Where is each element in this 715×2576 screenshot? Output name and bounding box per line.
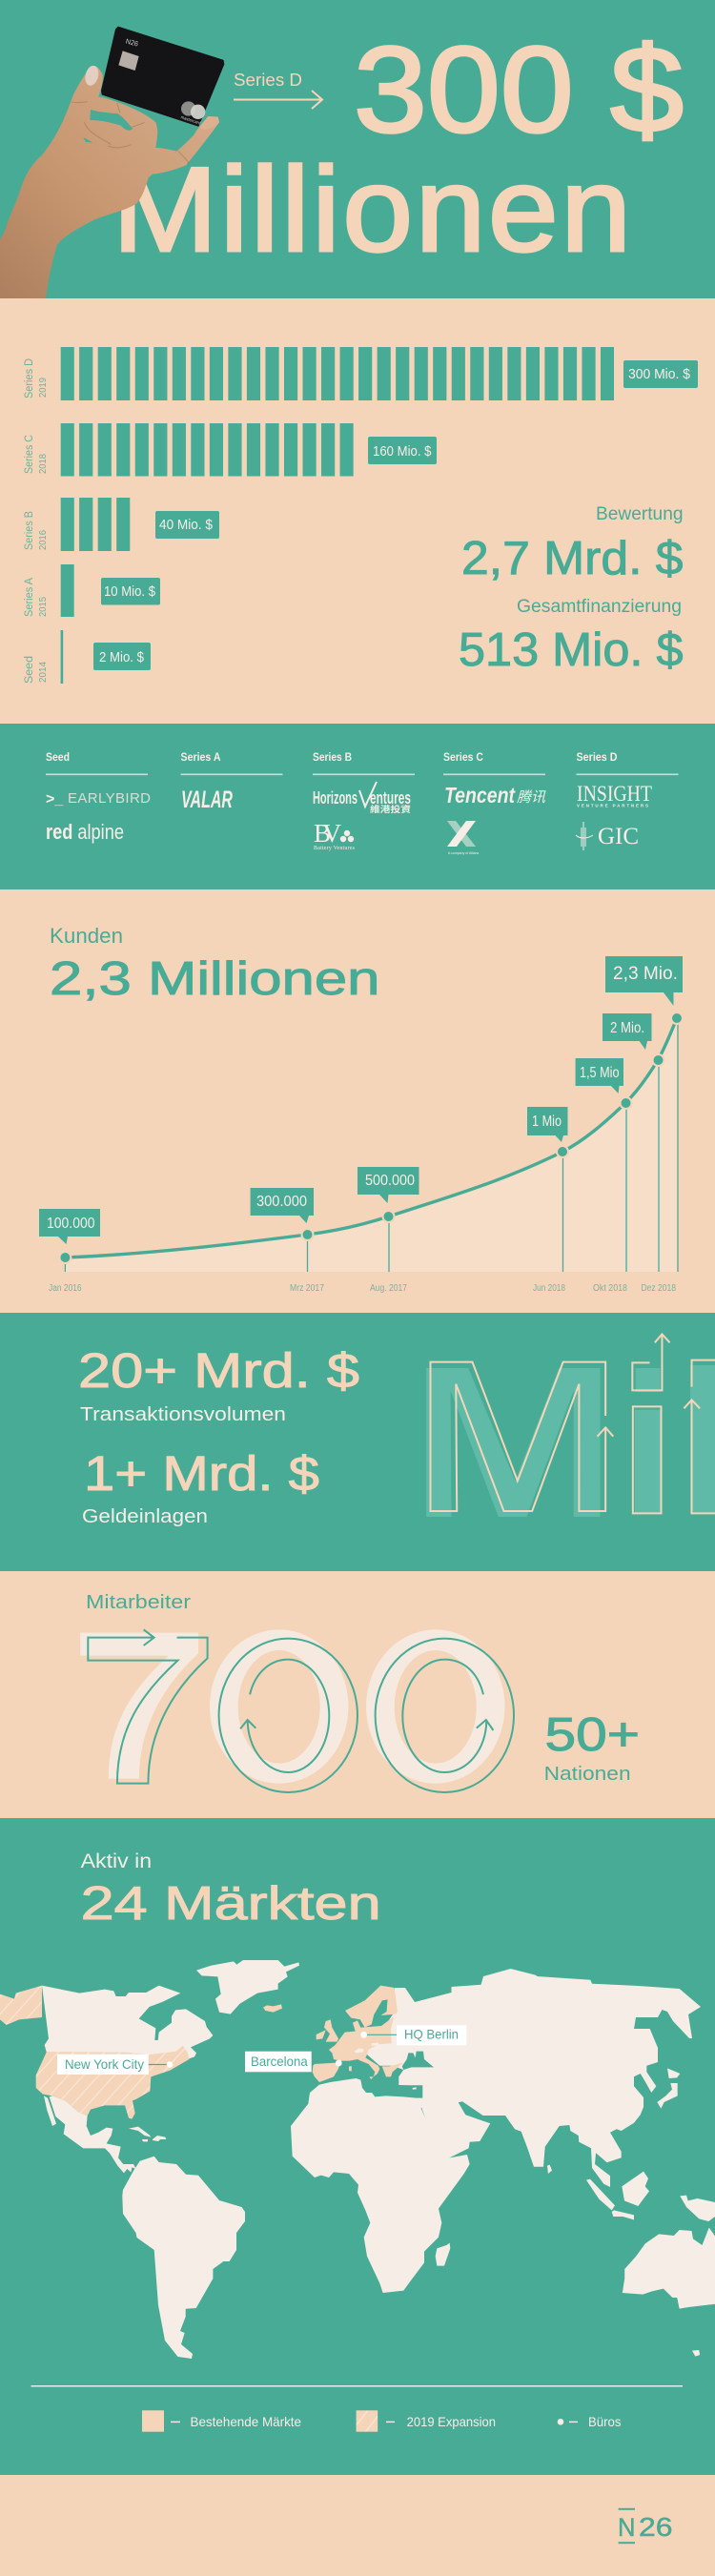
column: Seed investors [46,750,151,844]
logo: N26 [618,2508,673,2544]
column: Seed investors: EARLYBIRD [68,790,151,807]
axis labels: rounds and years: 2015 [37,597,49,617]
axis labels: dates: Aug. 2017 [370,1283,407,1294]
axis labels: dates: Jan 2016 [49,1283,82,1294]
legend: 2019 Expansion [407,2414,496,2429]
column: Series C investors [443,750,546,855]
chart: funding bars [61,347,614,684]
callouts: customer milestones: 100.000 [47,1216,95,1232]
axis labels: dates: Dez 2018 [641,1283,676,1294]
axis labels: rounds and years: Series B [24,511,35,550]
label: Barcelona office: Barcelona [251,2054,308,2069]
heading: 300 $: 300 $ [354,22,684,158]
column: Series D investors: GIC [598,824,639,849]
map: Africa, Europe and Mediterranean [291,2016,470,2293]
axis labels: rounds and years: 2019 [37,378,49,398]
icon: black card: mastercard [180,114,202,126]
panel: footer [0,2475,715,2576]
column: Series B investors: entures [370,788,411,808]
map: South America [122,2157,245,2359]
map: Asian islands [547,2068,715,2221]
column: Series D investors: Series D [576,750,618,764]
stat: Gesamtfinanzierung [459,597,683,676]
column: Series B investors: Horizons [313,788,358,808]
stat: deposits: Geldeinlagen [82,1506,208,1527]
stat: Bewertung: Bewertung [596,504,683,524]
stat: nations: Nationen [544,1764,631,1785]
column: Series C investors: 腾讯 [517,787,546,807]
axis labels: rounds and years: Series A [24,578,35,617]
panel: customers [0,889,715,1313]
logo: N26: 26 [639,2512,673,2542]
column: Series A investors: VALAR [181,787,233,813]
bar value labels: 10 Mio. $ [104,584,155,600]
axis labels: rounds and years: 2016 [37,530,49,550]
column: Series D investors [576,750,679,850]
label: Kunden: Kunden [50,924,123,948]
callouts: customer milestones: 2,3 Mio. [613,964,678,984]
legend: Bestehende Märkte [191,2414,301,2429]
stat: Gesamtfinanzierung: Gesamtfinanzierung [517,597,682,617]
panel: funding rounds [0,298,715,724]
illustration: outlined letters Mil [426,1334,715,1517]
panel: markets [0,1818,715,2475]
panel: investors [0,724,715,889]
stat: deposits [82,1446,319,1527]
column: Series B investors: Battery Ventures [314,846,356,851]
icon: black card [102,27,224,126]
axis labels: rounds and years: Series D [24,358,35,399]
map: Eurasia [367,1969,701,2187]
stat: Bewertung [461,504,683,584]
heading: Millionen: Millionen [112,143,631,276]
stat: Bewertung: 2,7 Mrd. $ [461,533,683,584]
column: Series B investors: BV [314,819,341,848]
illustration: outlined number 700 [80,1629,514,1792]
bar value labels: 160 Mio. $ [373,444,431,460]
column: Series C investors: Tencent [444,783,516,808]
column: Series B investors [313,750,415,851]
stat: nations: 50+ [545,1709,640,1761]
column: Series B investors: 維港投資 [370,803,411,815]
bar value labels [93,360,698,670]
axis labels: rounds and years: 2014 [37,662,49,683]
callouts: customer milestones [39,956,683,1244]
bar value labels: 300 Mio. $ [628,367,690,382]
stat: deposits: 1+ Mrd. $ [84,1446,319,1501]
callouts: customer milestones: 1 Mio [532,1114,562,1130]
callouts: customer milestones: 1,5 Mio [580,1065,620,1081]
label: Barcelona office [245,2052,342,2072]
label: Aktiv in: Aktiv in [81,1850,152,1872]
axis labels: dates: Okt 2018 [593,1283,627,1294]
callouts: customer milestones: 2 Mio. [610,1020,644,1036]
legend: Büros [588,2414,622,2429]
axis labels: rounds and years: Seed [24,656,35,684]
bar value labels: 40 Mio. $ [159,518,213,533]
column: Series A investors: Series A [181,750,221,764]
legend [31,2385,683,2432]
axis labels: rounds and years: 2018 [37,454,49,474]
label: Series D: Series D [234,71,302,90]
stat: Gesamtfinanzierung: 513 Mio. $ [459,624,683,676]
panel: hero [0,0,715,298]
axis labels: rounds and years: Series C [24,435,35,474]
column: Seed investors: >_ [46,791,64,808]
image: hand holding card [0,27,224,298]
label: Mitarbeiter: Mitarbeiter [86,1592,191,1613]
label: New York City office [57,2055,173,2075]
column: Series C investors: A company of Allianz [448,851,480,855]
label: HQ Berlin office: HQ Berlin [404,2027,459,2042]
chart: customer growth curve [59,1012,683,1272]
heading: 2,3 Millionen: 2,3 Millionen [50,953,379,1005]
map: Australia [623,2228,715,2357]
column: Series C investors: Series C [443,750,483,764]
stat: transaction volume [78,1343,359,1425]
callouts: customer milestones: 500.000 [365,1173,415,1189]
column: Seed investors: red alpine [46,820,124,844]
axis labels: dates: Jun 2018 [533,1283,565,1294]
column: Series A investors [181,750,282,813]
axis labels: dates [49,1283,676,1294]
panel: employees [0,1571,715,1818]
map: Scandinavia [345,1986,398,2028]
column: Series D investors: VENTURE PARTNERS [577,803,648,808]
bar value labels: 2 Mio. $ [99,650,144,665]
heading: 24 Märkten: 24 Märkten [81,1878,381,1930]
column: Series D investors: INSIGHT [577,782,652,806]
logo: N26: N [618,2513,635,2542]
panel: volume and deposits [0,1313,715,1571]
icon: black card: N26 [125,37,139,49]
label: HQ Berlin office [360,2025,466,2045]
stat: transaction volume: 20+ Mrd. $ [78,1343,359,1398]
stat: nations [544,1709,640,1785]
column: Series B investors: Series B [313,750,352,764]
stat: transaction volume: Transaktionsvolumen [80,1404,286,1425]
column: Seed investors: Seed [46,750,70,764]
arrow: Series D [234,91,322,109]
map: Americas and Greenland [0,1960,299,2173]
map: world [0,1960,715,2359]
label: New York City office: New York City [65,2056,144,2072]
axis labels: rounds and years [24,358,49,684]
axis labels: dates: Mrz 2017 [290,1283,324,1294]
callouts: customer milestones: 300.000 [256,1194,307,1210]
